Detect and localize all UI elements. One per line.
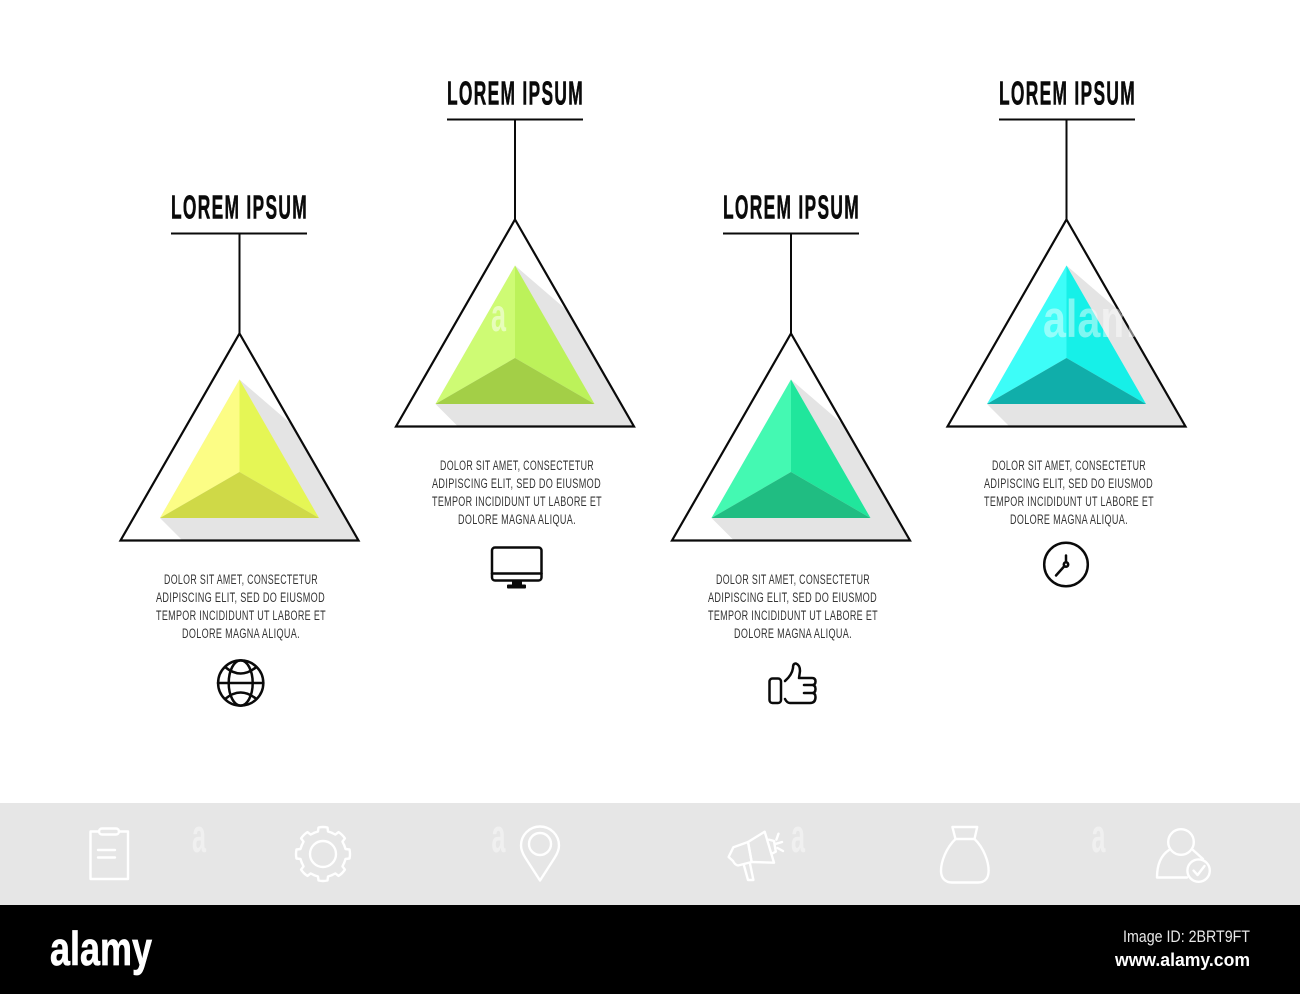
text block: step 3: ADIPISCING ELIT, SED DO EIUSMOD (708, 590, 877, 605)
panel: step 2 green triangle (396, 74, 634, 588)
triangle outline: step 1 (120, 334, 358, 540)
icon: verified user (1157, 829, 1210, 882)
panel: step 4 cyan triangle (948, 74, 1186, 586)
heading: step 2: LOREM IPSUM (447, 74, 584, 112)
icon strip band (0, 803, 1300, 905)
triangle outline: step 4 (948, 220, 1186, 426)
text block: step 1: TEMPOR INCIDIDUNT UT LABORE ET (156, 608, 326, 623)
watermark: on green pyramid: a (491, 289, 506, 341)
text block: step 1: DOLORE MAGNA ALIQUA. (182, 626, 300, 641)
icon: globe (218, 660, 263, 706)
text block: step 4: DOLOR SIT AMET, CONSECTETUR (992, 458, 1146, 473)
text block: step 1: DOLOR SIT AMET, CONSECTETUR (164, 572, 318, 587)
pyramid: step 1 (160, 380, 319, 518)
logo: alamy: alamy (50, 922, 152, 975)
text block: step 3: TEMPOR INCIDIDUNT UT LABORE ET (708, 608, 878, 623)
triangle shadow: step 1 (160, 380, 357, 540)
connector: step 3 (723, 234, 859, 334)
connector: step 4 (999, 120, 1135, 220)
triangle shadow: step 3 (712, 380, 908, 540)
text block: step 4: ADIPISCING ELIT, SED DO EIUSMOD (984, 476, 1153, 491)
panel: step 1 yellow triangle (120, 188, 358, 706)
connector: step 2 (447, 120, 583, 220)
icon: money bag (941, 827, 989, 882)
text block: step 3: DOLOR SIT AMET, CONSECTETUR (716, 572, 870, 587)
pyramid: step 3 (712, 380, 870, 518)
text block: step 2 (432, 458, 602, 527)
icon: clock (1044, 543, 1088, 586)
watermark: band letters: a (192, 809, 206, 862)
text block: step 2: TEMPOR INCIDIDUNT UT LABORE ET (432, 494, 602, 509)
website: www.alamy.com (1114, 950, 1250, 970)
text block: step 2: ADIPISCING ELIT, SED DO EIUSMOD (432, 476, 601, 491)
image id: Image ID: 2BRT9FT (1123, 927, 1250, 946)
pyramid: step 4 (987, 266, 1146, 404)
triangle shadow: step 2 (436, 266, 632, 426)
connector: step 1 (171, 234, 307, 334)
watermark: band letters: a (1092, 809, 1106, 862)
footer bar (0, 905, 1300, 994)
text block: step 3 (708, 572, 878, 641)
pyramid: step 2 (436, 266, 594, 404)
watermark: band letters: a (492, 809, 506, 862)
heading: step 1: LOREM IPSUM (171, 188, 308, 226)
triangle outline: step 2 (396, 220, 634, 426)
text block: step 1 (156, 572, 326, 641)
icon: megaphone (729, 832, 783, 880)
watermark: band letters: a (791, 809, 805, 862)
text block: step 3: DOLORE MAGNA ALIQUA. (734, 626, 852, 641)
text block: step 1: ADIPISCING ELIT, SED DO EIUSMOD (156, 590, 325, 605)
watermark: band letters (192, 809, 1106, 862)
text block: step 2: DOLORE MAGNA ALIQUA. (458, 512, 576, 527)
triangle shadow: step 4 (987, 266, 1184, 426)
text block: step 4: TEMPOR INCIDIDUNT UT LABORE ET (984, 494, 1154, 509)
text block: step 2: DOLOR SIT AMET, CONSECTETUR (440, 458, 594, 473)
watermark: on cyan pyramid: alam (1043, 290, 1137, 349)
icon: monitor (492, 548, 542, 588)
icon: gear (296, 827, 350, 881)
panel: step 3 teal-green triangle (672, 188, 910, 703)
icon: clipboard (90, 828, 128, 879)
icon: thumbs up (770, 663, 816, 703)
triangle outline: step 3 (672, 334, 910, 540)
text block: step 4: DOLORE MAGNA ALIQUA. (1010, 512, 1128, 527)
heading: step 4: LOREM IPSUM (999, 74, 1136, 112)
heading: step 3: LOREM IPSUM (723, 188, 860, 226)
text block: step 4 (984, 458, 1154, 527)
icon: map pin (521, 826, 559, 880)
